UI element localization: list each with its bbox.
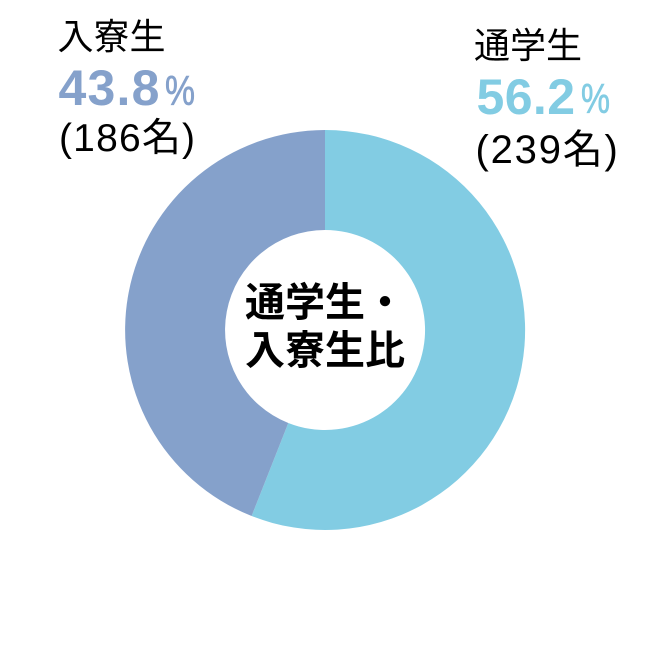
label: dormitory students: (186名) xyxy=(59,117,196,160)
label: commuting students xyxy=(474,25,620,172)
label: commuting students: 56.2 xyxy=(476,69,575,125)
label: dormitory students: 入寮生 xyxy=(58,16,166,57)
label: commuting students: (239名) xyxy=(476,128,620,172)
donut segment: dormitory students 43.8% xyxy=(125,130,325,516)
center title: 入寮生比 xyxy=(245,329,405,373)
label: dormitory students: 43.8 xyxy=(58,60,161,116)
label: dormitory students: % xyxy=(165,67,195,114)
label: dormitory students xyxy=(58,16,196,160)
donut segment: commuting students 56.2% xyxy=(252,130,525,530)
label: commuting students: 通学生 xyxy=(474,25,582,66)
center title xyxy=(245,281,405,373)
center title: 通学生・ xyxy=(245,281,405,325)
label: commuting students: % xyxy=(581,75,610,122)
